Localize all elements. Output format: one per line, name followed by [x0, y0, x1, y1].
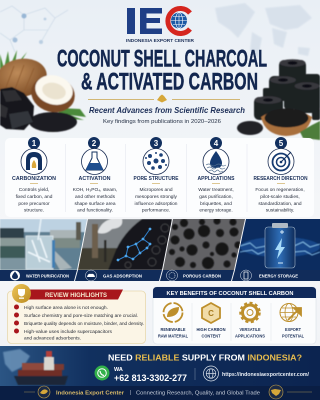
- palm leaf: [0, 50, 27, 80]
- benefit: export potential: POTENTIAL: [282, 334, 304, 338]
- scattered carbon: [237, 121, 263, 135]
- benefit: renewable raw material: RENEWABLE: [160, 327, 186, 332]
- step 4 applications: energy storage.: [199, 208, 233, 214]
- step 3 pore structure: 3: [154, 139, 159, 148]
- panel: application photo strip: [0, 218, 320, 281]
- gold divider ornament: [88, 94, 240, 102]
- caption bar: energy storage: ENERGY STORAGE: [259, 274, 298, 278]
- footer tagline: Connecting Research, Quality, and Global Trade: [136, 390, 260, 396]
- trophy icon: [12, 284, 31, 303]
- charcoal granules: [29, 112, 77, 132]
- shell fibre lines: [5, 65, 42, 92]
- footer tagline: |: [130, 390, 131, 396]
- step 1 carbonization: [12, 137, 56, 214]
- briquette holes: [263, 61, 312, 102]
- call to action heading: NEED RELIABLE SUPPLY FROM INDONESIA?: [108, 352, 302, 362]
- green leaves: [300, 121, 320, 140]
- half coconut: [27, 71, 79, 117]
- highlights text: Surface chemistry and pore-size matching are crucial.: [24, 313, 138, 318]
- step 3 pore structure: mesopores strongly: [135, 194, 178, 200]
- phone number: +62 813-3302-277: [114, 373, 187, 384]
- step 5 research direction: standardization, and: [258, 201, 302, 207]
- benefit: versatile applications: VERSATILE: [240, 327, 261, 332]
- briquette top faces: [254, 59, 320, 104]
- step 2 activation: [73, 137, 117, 214]
- benefit: export potential: EXPORT: [285, 327, 301, 332]
- step 2 activation: KOH, H₃PO₄, steam,: [73, 187, 117, 193]
- step 3 pore structure: PORE STRUCTURE: [134, 176, 179, 182]
- ribbon heading: REVIEW HIGHLIGHTS: [45, 293, 107, 299]
- step 1 carbonization: fixed carbon, and: [16, 194, 53, 200]
- step 5 research direction: pilot-scale studies,: [260, 194, 300, 200]
- step 2 activation: 2: [92, 139, 97, 148]
- caption bar: water purification: WATER PURIFICATION: [26, 274, 70, 278]
- cargo ship: [14, 351, 68, 385]
- charcoal briquettes illustration right: [237, 59, 320, 140]
- step 3 pore structure: influence adsorption: [135, 201, 178, 207]
- footer tagline: [24, 385, 312, 399]
- step 4 applications: [198, 137, 235, 214]
- step 5 research direction: RESEARCH DIRECTION: [254, 176, 308, 182]
- panel: key benefits: [153, 287, 316, 344]
- charcoal chunks: [0, 87, 34, 130]
- whatsapp icon: [94, 366, 110, 380]
- benefit: renewable raw material: RAW MATERIAL: [158, 334, 188, 338]
- highlights text: and advanced adsorbents.: [24, 336, 81, 340]
- step 1 carbonization: pore precursor: [18, 201, 50, 207]
- logo caption: INDONESIA EXPORT CENTER: [126, 38, 195, 43]
- caption bar: water purification: [0, 270, 77, 281]
- globe icon: [204, 366, 218, 381]
- step 5 research direction: Focus on regeneration,: [255, 187, 305, 193]
- benefit: high carbon content: C: [208, 309, 214, 318]
- footer lower strip: [0, 386, 320, 400]
- benefit: renewable raw material: [158, 303, 188, 338]
- step 3 pore structure: Micropores and: [139, 187, 173, 193]
- caption bar: porous carbon: [160, 270, 234, 281]
- photo: energy storage: [234, 219, 320, 270]
- wooden bowl of carbon: [261, 108, 312, 136]
- phone number: [114, 367, 187, 384]
- benefit: high carbon content: CONTENT: [202, 334, 221, 338]
- logo letters I E: [127, 8, 162, 34]
- highlights text: [24, 305, 144, 340]
- subtitle: Recent Advances from Scientific Research: [89, 106, 245, 115]
- step 1 carbonization: CARBONIZATION: [12, 176, 56, 182]
- footer map silhouette: [3, 349, 30, 372]
- step 3 pore structure: performance.: [142, 208, 170, 214]
- benefit: export potential: [280, 304, 304, 338]
- caption bar: gas adsorption: GAS ADSORPTION: [103, 274, 143, 278]
- caption bar: gas adsorption: [75, 270, 162, 281]
- benefits header: [153, 287, 316, 298]
- panel: research steps: [5, 137, 314, 217]
- benefit: high carbon content: HIGH CARBON: [196, 327, 226, 332]
- benefit separators: [192, 303, 271, 341]
- footer banner: [0, 346, 320, 400]
- highlights text: High surface area alone is not enough.: [24, 305, 108, 310]
- world map decoration: [215, 3, 312, 58]
- logo globe: [171, 12, 187, 28]
- step 1 carbonization: structure.: [24, 208, 44, 214]
- step 4 applications: Water treatment,: [198, 187, 234, 193]
- footer tagline: Indonesia Export Center: [56, 390, 124, 396]
- step 4 applications: gas purification,: [199, 194, 233, 200]
- step 2 activation: ACTIVATION: [78, 176, 111, 182]
- step 1 carbonization: Controls yield,: [19, 187, 49, 193]
- step 4 applications: 4: [214, 139, 219, 148]
- step 3 pore structure: [134, 137, 179, 214]
- column separators: [66, 144, 247, 212]
- step 5 research direction: 5: [279, 139, 284, 148]
- photo: gas adsorption: [75, 218, 175, 270]
- caption bar: porous carbon: POROUS CARBON: [183, 274, 222, 278]
- phone number: WA: [114, 367, 123, 373]
- photo: water purification: [0, 219, 90, 270]
- step 1 carbonization: 1: [32, 139, 37, 148]
- logo letter C: [168, 9, 190, 34]
- step 2 activation: shape surface area: [74, 201, 116, 207]
- step 2 activation: and other methods: [75, 194, 116, 200]
- benefits header: KEY BENEFITS OF COCONUT SHELL CARBON: [166, 291, 294, 297]
- highlights text: Briquette quality depends on moisture, binder, and density.: [24, 321, 144, 326]
- step 4 applications: APPLICATIONS: [198, 176, 235, 182]
- benefit: versatile applications: APPLICATIONS: [235, 334, 265, 338]
- benefit: high carbon content: [196, 303, 226, 338]
- step 4 applications: briquettes, and: [200, 201, 232, 207]
- IEC logo: [126, 8, 195, 43]
- bullet markers: [14, 304, 19, 334]
- step 5 research direction: sustainability.: [266, 208, 294, 214]
- panel: review highlights: [8, 284, 146, 344]
- molecule network decoration: [0, 6, 68, 52]
- caption bar: energy storage: [232, 270, 320, 281]
- briquette stack: [254, 60, 320, 120]
- step 2 activation: and functionality.: [77, 208, 113, 214]
- palm leaf lower: [58, 108, 86, 120]
- key findings line: Key findings from publications in 2020–2026: [103, 119, 221, 125]
- photo: porous carbon: [163, 219, 245, 270]
- benefit: versatile applications: [235, 303, 265, 338]
- coconut and charcoal illustration left: [0, 50, 86, 132]
- title: [57, 46, 267, 96]
- highlights text: High-value uses include supercapacitors: [24, 329, 113, 334]
- step 5 research direction: [254, 137, 308, 214]
- website url: https://indonesiaexportcenter.com/: [222, 372, 310, 378]
- whole coconut: [0, 54, 50, 102]
- divider: [194, 368, 196, 380]
